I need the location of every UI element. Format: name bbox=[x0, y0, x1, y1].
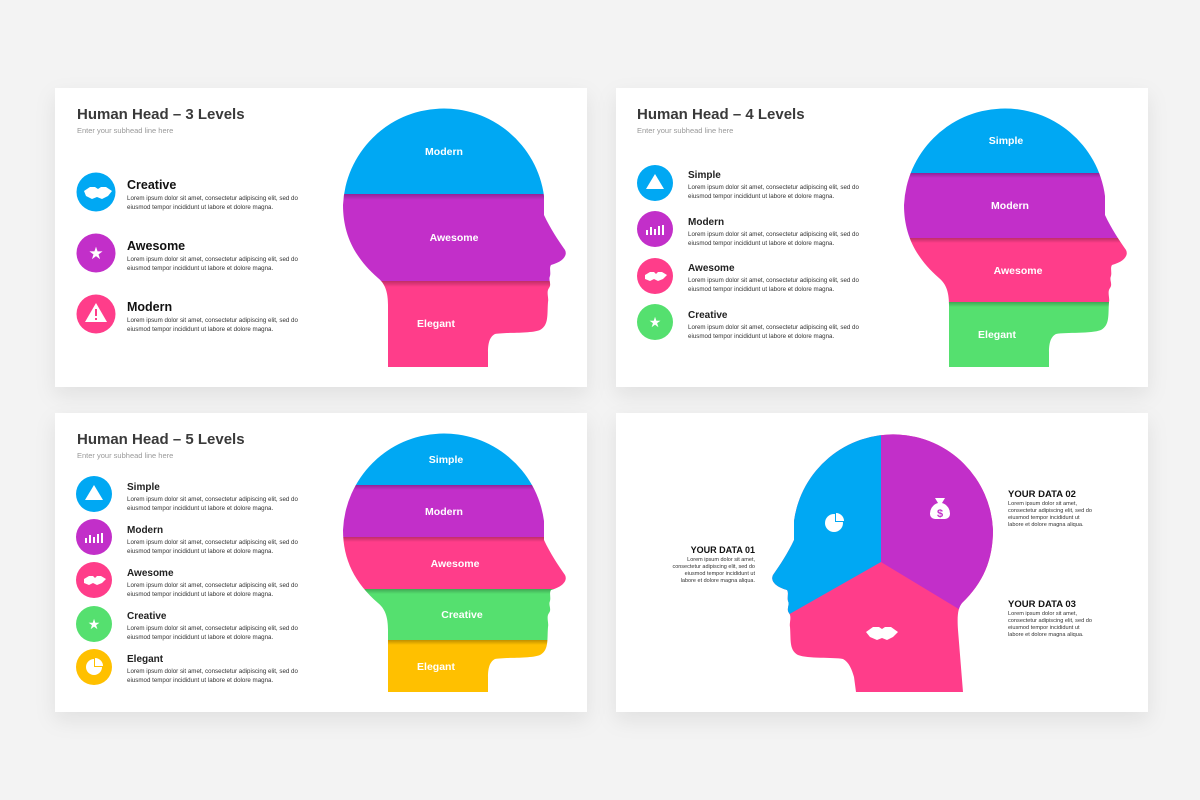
text: data 02: labore et dolore magna aliqua. bbox=[1008, 522, 1084, 528]
title: Human Head – 3 Levels bbox=[77, 106, 245, 123]
item: Modern: eiusmod tempor incididunt ut labore et dolore magna. bbox=[688, 240, 834, 247]
item: Modern bbox=[76, 294, 298, 334]
item: Creative: eiusmod tempor incididunt ut labore et dolore magna. bbox=[127, 204, 273, 211]
icon: handshake bbox=[866, 627, 898, 640]
text: data 03: labore et dolore magna aliqua. bbox=[1008, 632, 1084, 638]
item: Awesome: eiusmod tempor incididunt ut labore et dolore magna. bbox=[127, 591, 273, 598]
item: Awesome bbox=[76, 562, 298, 598]
item: Elegant bbox=[76, 649, 298, 685]
item: Creative: ★ bbox=[649, 314, 661, 330]
item: Simple: Lorem ipsum dolor sit amet, consectetur adipiscing elit, sed do bbox=[688, 184, 859, 191]
item: Awesome: Lorem ipsum dolor sit amet, consectetur adipiscing elit, sed do bbox=[127, 582, 298, 589]
subhead: Enter your subhead line here bbox=[77, 451, 173, 460]
item: Creative bbox=[76, 606, 298, 642]
head: 5 levels: Creative bbox=[441, 609, 483, 621]
item: Modern bbox=[76, 519, 298, 555]
text: data 01: consectetur adipiscing elit, sed do bbox=[672, 564, 755, 570]
text: data 01: YOUR DATA 01 bbox=[691, 545, 755, 555]
item: Simple bbox=[76, 476, 298, 512]
head: 5 levels: Simple bbox=[429, 454, 463, 466]
item: Creative: Lorem ipsum dolor sit amet, consectetur adipiscing elit, sed do bbox=[127, 195, 298, 202]
item: Creative: ★ bbox=[88, 616, 100, 632]
item: Elegant: eiusmod tempor incididunt ut labore et dolore magna. bbox=[127, 677, 273, 684]
title: Human Head – 5 Levels bbox=[77, 431, 245, 448]
head: 3 levels: Awesome bbox=[430, 232, 479, 244]
text: data 02: consectetur adipiscing elit, sed do bbox=[1008, 508, 1092, 514]
item: Creative bbox=[76, 172, 298, 212]
item: Modern: eiusmod tempor incididunt ut labore et dolore magna. bbox=[127, 548, 273, 555]
item: Modern: Modern bbox=[127, 525, 163, 536]
head: 5 levels: Modern bbox=[425, 506, 463, 518]
item: Elegant: Lorem ipsum dolor sit amet, consectetur adipiscing elit, sed do bbox=[127, 668, 298, 675]
item: Creative: Creative bbox=[688, 310, 728, 321]
item: Awesome: Awesome bbox=[127, 568, 174, 579]
item: Simple: eiusmod tempor incididunt ut labore et dolore magna. bbox=[127, 505, 273, 512]
head: 4 levels: Awesome bbox=[994, 265, 1043, 277]
text: data 02: Lorem ipsum dolor sit amet, bbox=[1008, 501, 1077, 507]
item: Awesome: eiusmod tempor incididunt ut labore et dolore magna. bbox=[127, 265, 273, 272]
item: Awesome bbox=[637, 258, 859, 294]
item: Modern: eiusmod tempor incididunt ut labore et dolore magna. bbox=[127, 326, 273, 333]
item: Awesome: eiusmod tempor incididunt ut labore et dolore magna. bbox=[688, 286, 834, 293]
head: 5 levels bbox=[343, 434, 566, 692]
text: data 03: YOUR DATA 03 bbox=[1008, 599, 1076, 610]
item: Awesome: Lorem ipsum dolor sit amet, consectetur adipiscing elit, sed do bbox=[688, 277, 859, 284]
panel: 3 levels bbox=[55, 88, 587, 387]
item: Simple: eiusmod tempor incididunt ut labore et dolore magna. bbox=[688, 193, 834, 200]
icon: money bag bbox=[930, 498, 950, 520]
item: Modern: Lorem ipsum dolor sit amet, consectetur adipiscing elit, sed do bbox=[127, 539, 298, 546]
text: data 02: YOUR DATA 02 bbox=[1008, 489, 1076, 500]
head: 3 levels bbox=[343, 108, 566, 367]
icon: pie chart bbox=[825, 513, 844, 532]
item: Simple: Lorem ipsum dolor sit amet, consectetur adipiscing elit, sed do bbox=[127, 496, 298, 503]
panel: 5 levels bbox=[55, 413, 587, 712]
head: 3 sections bbox=[772, 434, 993, 692]
title: Human Head – 4 Levels bbox=[637, 106, 805, 123]
icon: money bag: $ bbox=[937, 508, 943, 520]
item: Creative: Lorem ipsum dolor sit amet, consectetur adipiscing elit, sed do bbox=[688, 324, 859, 331]
head: 5 levels: Elegant bbox=[417, 661, 455, 673]
item: Elegant: Elegant bbox=[127, 654, 164, 665]
text: data 02 bbox=[1008, 489, 1092, 528]
item: Creative: eiusmod tempor incididunt ut labore et dolore magna. bbox=[688, 333, 834, 340]
text: data 03: consectetur adipiscing elit, sed do bbox=[1008, 618, 1092, 624]
item: Simple: Simple bbox=[127, 482, 160, 493]
panel: data head bbox=[616, 413, 1148, 712]
panel: 4 levels bbox=[616, 88, 1148, 387]
head: 3 levels: Modern bbox=[425, 146, 463, 158]
head: 4 levels bbox=[904, 108, 1127, 367]
text: data 01: labore et dolore magna aliqua. bbox=[681, 578, 755, 584]
text: data 03 bbox=[1008, 599, 1092, 638]
item: Awesome: Awesome bbox=[688, 263, 735, 274]
item: Modern: Modern bbox=[127, 300, 172, 314]
text: data 01: eiusmod tempor incididunt ut bbox=[685, 571, 755, 577]
text: data 01 bbox=[672, 545, 755, 584]
head: 4 levels: Elegant bbox=[978, 329, 1016, 341]
item: Creative: eiusmod tempor incididunt ut labore et dolore magna. bbox=[127, 634, 273, 641]
item: Simple bbox=[637, 165, 859, 201]
text: data 03: eiusmod tempor incididunt ut bbox=[1008, 625, 1080, 631]
item: Simple: Simple bbox=[688, 170, 721, 181]
text: data 02: eiusmod tempor incididunt ut bbox=[1008, 515, 1080, 521]
text: data 01: Lorem ipsum dolor sit amet, bbox=[687, 557, 755, 563]
item: Creative: Lorem ipsum dolor sit amet, consectetur adipiscing elit, sed do bbox=[127, 625, 298, 632]
item: Creative: Creative bbox=[127, 611, 167, 622]
item: Modern bbox=[637, 211, 859, 247]
item: Awesome: ★ bbox=[88, 244, 104, 263]
head: 5 levels: Awesome bbox=[431, 558, 480, 570]
item: Awesome: Lorem ipsum dolor sit amet, consectetur adipiscing elit, sed do bbox=[127, 256, 298, 263]
item: Creative: Creative bbox=[127, 178, 176, 192]
item: Modern: Modern bbox=[688, 217, 724, 228]
head: 3 levels: Elegant bbox=[417, 318, 455, 330]
subhead: Enter your subhead line here bbox=[77, 126, 173, 135]
item: Creative bbox=[637, 304, 859, 340]
text: data 03: Lorem ipsum dolor sit amet, bbox=[1008, 611, 1077, 617]
item: Awesome bbox=[76, 234, 298, 272]
head: 4 levels: Modern bbox=[991, 200, 1029, 212]
subhead: Enter your subhead line here bbox=[637, 126, 733, 135]
item: Modern: Lorem ipsum dolor sit amet, consectetur adipiscing elit, sed do bbox=[127, 317, 298, 324]
item: Awesome: Awesome bbox=[127, 239, 185, 253]
head: 4 levels: Simple bbox=[989, 135, 1023, 147]
item: Modern: Lorem ipsum dolor sit amet, consectetur adipiscing elit, sed do bbox=[688, 231, 859, 238]
